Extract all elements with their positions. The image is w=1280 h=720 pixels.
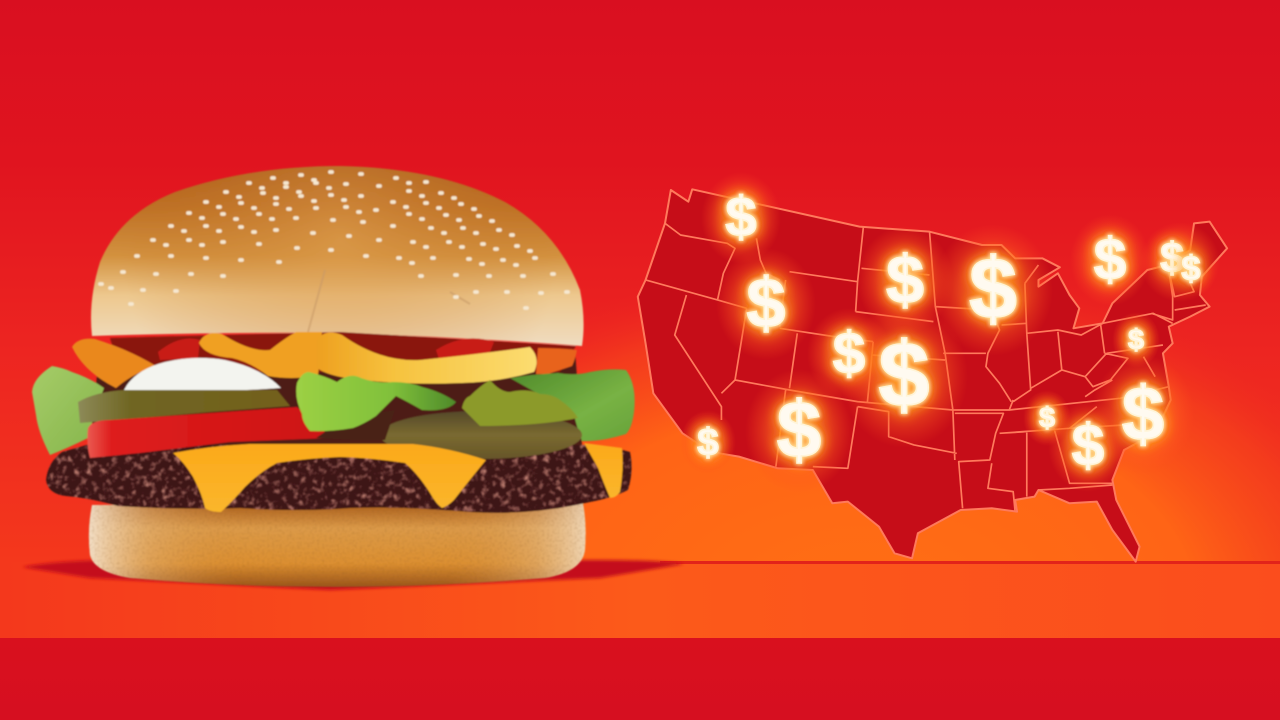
- dollar: Pennsylvania: $: [1128, 324, 1144, 355]
- dollar: Kansas: $: [878, 324, 930, 426]
- cheese slice: [173, 444, 486, 512]
- sesame seeds: [100, 172, 568, 308]
- chip left: [72, 339, 156, 388]
- patty: [46, 442, 632, 513]
- map silhouette: [638, 189, 1227, 562]
- dollar: Colorado: $: [833, 321, 865, 386]
- bottom bun: [89, 503, 586, 587]
- right cheese: [584, 443, 623, 498]
- mayo: [124, 358, 281, 392]
- lettuce right: [510, 369, 635, 441]
- glowing dollar signs: [697, 185, 1201, 478]
- chip large: [317, 332, 537, 384]
- state borders: [646, 223, 1206, 512]
- lettuce left: [32, 366, 104, 455]
- pickle left: [78, 390, 290, 423]
- dark shadow under center: [316, 410, 395, 440]
- filling underlay: [90, 345, 582, 445]
- US map: [638, 189, 1227, 562]
- ketchup layer: [110, 332, 576, 372]
- jalapeno ring top: [462, 380, 578, 426]
- lettuce center: [296, 372, 456, 431]
- chip middle: [199, 332, 322, 378]
- infographic scene: [0, 161, 1280, 638]
- dollar: Minnesota: $: [969, 241, 1017, 337]
- dollar glow halos: [680, 172, 1220, 493]
- dollar: New Hampshire: $: [1182, 250, 1201, 288]
- burger shadow: [22, 560, 684, 590]
- jalapeno slice: [380, 411, 582, 459]
- dollar: Vermont: $: [1160, 234, 1184, 281]
- dollar: Idaho: $: [747, 264, 785, 342]
- burger: [32, 166, 635, 587]
- dollar: Georgia: $: [1072, 413, 1104, 478]
- ketchup highlights: [158, 338, 494, 362]
- floor: [0, 561, 1280, 639]
- top bun: [91, 166, 584, 346]
- tomato: [87, 407, 332, 458]
- dollar: New Mexico: $: [777, 385, 821, 474]
- bottom band: [0, 638, 1280, 720]
- dollar: Carolinas: $: [1122, 372, 1164, 457]
- chip right: [536, 348, 577, 374]
- dollar: North Dakota: $: [886, 242, 924, 318]
- dollar: Great Lakes: $: [1094, 227, 1126, 292]
- dollar: Alabama: $: [1039, 402, 1055, 433]
- dollar: California: $: [697, 422, 719, 464]
- dollar: Washington: $: [725, 185, 757, 248]
